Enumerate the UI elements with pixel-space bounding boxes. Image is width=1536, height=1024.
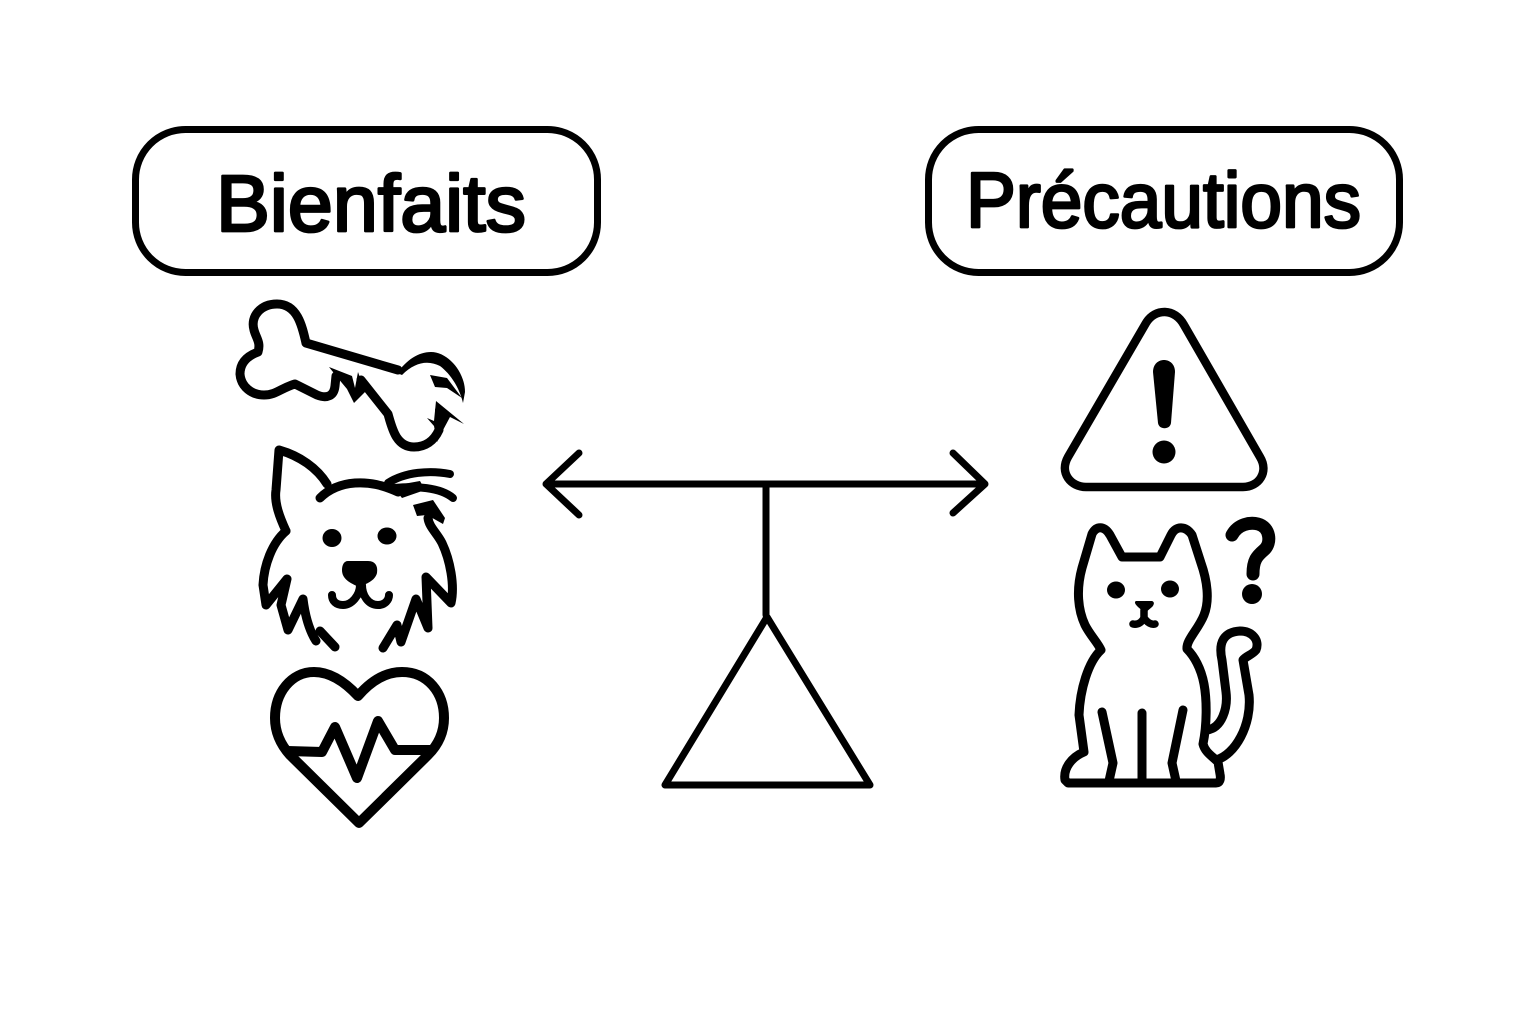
panel: Bienfaits heading <box>136 130 598 272</box>
panel: Précautions heading: Précautions <box>966 156 1361 244</box>
icon: balance scale <box>546 453 985 785</box>
icon: cat with question mark <box>1065 523 1269 783</box>
double arrow beam <box>546 453 985 515</box>
question mark <box>1232 523 1269 574</box>
post <box>762 484 770 615</box>
icon: warning triangle <box>1065 312 1263 487</box>
icon: dog face <box>263 450 453 648</box>
icon: heart with pulse <box>275 672 444 823</box>
panel: Bienfaits heading: Bienfaits <box>216 159 526 248</box>
icon: bone <box>240 304 465 447</box>
triangle base <box>665 617 870 785</box>
panel: Précautions heading <box>928 130 1400 272</box>
